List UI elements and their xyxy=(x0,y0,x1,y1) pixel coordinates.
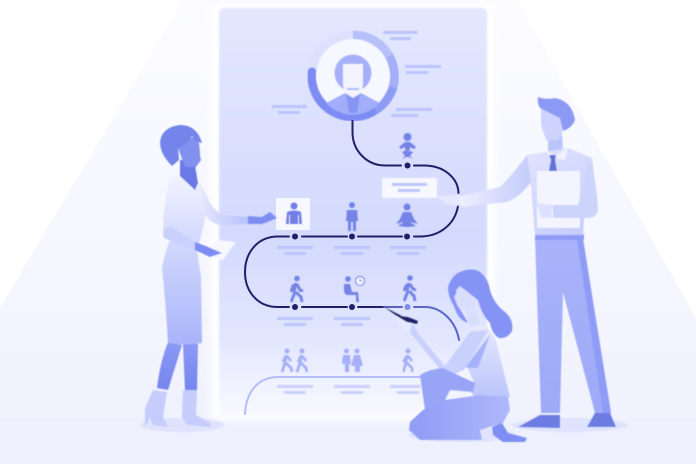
icon: baby xyxy=(399,133,416,159)
floor xyxy=(0,419,696,457)
placeholder text lines around donut xyxy=(272,31,441,117)
icon: walking person 1 xyxy=(291,276,303,302)
icon: walking person 2 xyxy=(404,275,416,301)
hand and cuff xyxy=(248,212,277,224)
hand at note xyxy=(437,195,460,206)
outstretched arm xyxy=(200,182,248,225)
forearm lower xyxy=(163,226,196,250)
hand xyxy=(395,314,412,332)
icon: seated person with clock xyxy=(344,276,364,302)
figure: man on right xyxy=(437,97,628,432)
icon: faded couple walking xyxy=(282,348,307,372)
lower hand xyxy=(195,242,222,257)
figure: woman on left xyxy=(140,125,277,432)
tablet xyxy=(204,240,236,260)
icon: adult bust xyxy=(286,202,302,224)
neck and face xyxy=(180,160,198,190)
panel: journey board xyxy=(211,4,495,420)
torso xyxy=(457,322,510,400)
folded leg xyxy=(409,395,510,440)
shadow between arm and torso xyxy=(465,335,490,368)
raised arm xyxy=(397,316,488,375)
white shirt patch xyxy=(452,367,474,382)
portrait xyxy=(316,39,390,113)
bare foot xyxy=(492,423,527,442)
icon: faded walker xyxy=(403,348,413,372)
figure: seated woman xyxy=(384,270,527,442)
shirt torso xyxy=(527,148,598,235)
profile donut chart xyxy=(312,35,394,117)
floor shadow xyxy=(140,418,224,432)
hand on clipboard xyxy=(537,203,553,218)
note card xyxy=(382,178,437,198)
belt xyxy=(535,234,584,240)
raised thigh xyxy=(420,368,475,410)
shoes xyxy=(518,415,560,428)
node label lines xyxy=(277,246,426,394)
clipboard xyxy=(537,171,580,228)
donut ring xyxy=(312,35,394,117)
hair xyxy=(160,125,202,166)
hair xyxy=(538,97,575,131)
legs xyxy=(157,342,182,390)
stylus xyxy=(384,307,418,324)
collar and tie xyxy=(547,148,568,163)
card behind adult icon xyxy=(276,198,310,230)
path nodes xyxy=(292,162,410,310)
icon: standing person xyxy=(346,202,358,231)
neck xyxy=(548,134,563,155)
icon: meditating person xyxy=(396,204,418,227)
holding arm xyxy=(553,157,598,218)
floor shadow xyxy=(512,418,628,432)
face and neck xyxy=(454,287,480,327)
journey path line xyxy=(245,121,458,307)
trousers xyxy=(535,238,611,413)
face xyxy=(541,108,562,140)
floor shadow xyxy=(408,428,516,442)
boots xyxy=(145,390,168,427)
icon: faded standing couple xyxy=(342,348,363,372)
fading path line xyxy=(245,307,459,414)
dress xyxy=(162,175,207,344)
extended arm xyxy=(457,155,531,207)
hair xyxy=(448,270,512,338)
